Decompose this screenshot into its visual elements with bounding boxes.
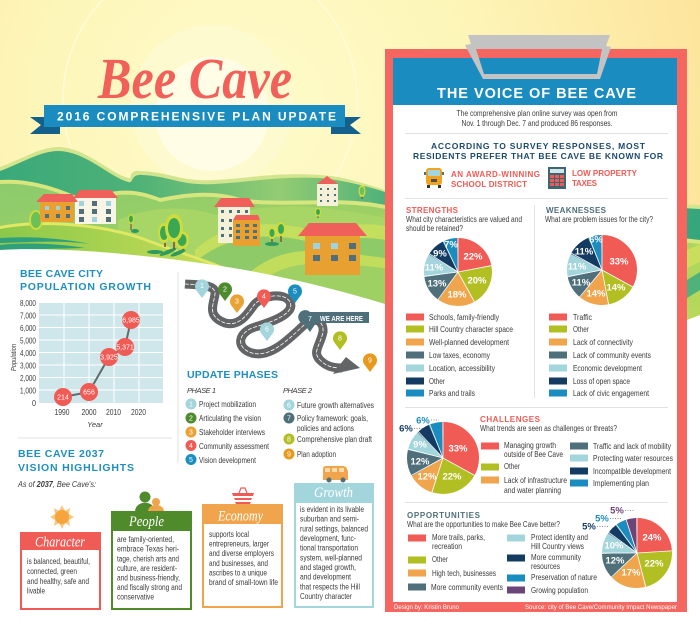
strengths section: STRENGTHS (406, 206, 459, 215)
line chart: population: Population (11, 344, 18, 371)
card: growth: is evident in its livable (300, 505, 364, 514)
survey intro: Nov. 1 through Dec. 7 and produced 86 responses. (462, 119, 612, 128)
card: people: and business-friendly, (117, 574, 180, 582)
survey heading: ACCORDING TO SURVEY RESPONSES, MOST (431, 141, 646, 151)
legend: weaknesses: Lack of civic engagement (573, 389, 650, 398)
pie chart: weaknesses: 11% (575, 246, 594, 258)
legend: opportunities: Other (432, 555, 448, 564)
opportunities section (407, 506, 673, 595)
pie chart: opportunities: 12% (605, 556, 625, 566)
pin 9 (363, 353, 377, 372)
pin 3 (230, 294, 244, 313)
survey heading: RESIDENTS PREFER THAT BEE CAVE BE KNOWN FOR (413, 151, 663, 161)
card: character (20, 532, 101, 609)
card: growth: tional transportation (300, 544, 358, 553)
card: economy (202, 504, 283, 607)
card: character: is balanced, beautiful, (27, 557, 90, 566)
pie chart: opportunities: 24% (642, 532, 662, 544)
card: growth: that respects the Hill (300, 582, 360, 591)
pie chart: strengths: 22% (463, 252, 483, 262)
legend: opportunities: High tech, businesses (432, 569, 496, 578)
background: sky and sun (0, 0, 700, 330)
clip tab (465, 35, 611, 79)
card: economy: Economy (217, 508, 263, 524)
legend: challenges: Traffic and lack of mobility (593, 442, 671, 451)
card: growth: Country character (300, 592, 352, 601)
line chart: population: 1,000 (20, 386, 36, 396)
card: growth: Growth (314, 485, 353, 501)
legend: challenges: Other (504, 462, 520, 471)
phase 1 list: Stakeholder interviews (199, 428, 265, 437)
phase 1 list: Articulating the vision (199, 414, 261, 423)
survey heading (413, 141, 663, 161)
phase 2 list (283, 386, 374, 460)
pie chart: strengths: 7% (444, 240, 458, 250)
heading: population growth (20, 268, 151, 293)
legend: strengths: Schools, family-friendly (429, 313, 499, 322)
heading: vision highlights: BEE CAVE 2037 (18, 448, 104, 460)
pie chart: weaknesses: 14% (586, 288, 606, 300)
pin 1: 1 (200, 283, 204, 290)
phase 2 list: 6 (287, 402, 291, 410)
panel title: THE VOICE OF BEE CAVE (437, 86, 636, 102)
line chart: population: 3,000 (20, 362, 36, 370)
card: economy: brand of small-town life (209, 578, 278, 587)
pie chart: challenges: 22% (442, 472, 462, 482)
pin 8: 8 (338, 336, 342, 342)
survey intro (456, 109, 618, 128)
legend: opportunities: More community (531, 553, 581, 562)
legend: strengths: Other (429, 377, 445, 386)
pin 4: 4 (262, 294, 266, 300)
pie chart: weaknesses: 14% (606, 282, 626, 294)
strengths section: should be retained? (406, 224, 463, 233)
pin 2 (218, 282, 232, 301)
heading: vision highlights: VISION HIGHLIGHTS (18, 462, 134, 474)
houses (36, 176, 367, 275)
legend: opportunities: resources (531, 562, 560, 571)
card: growth: development, func- (300, 534, 356, 543)
phase 2 list: Policy framework: goals, (297, 414, 368, 423)
pin 3: 3 (235, 298, 239, 306)
opportunities section: OPPORTUNITIES (407, 511, 481, 520)
known for: property taxes (572, 169, 638, 188)
phase 2 list: Plan adoption (297, 450, 336, 459)
pin 5 (288, 284, 302, 303)
phase 1 list: PHASE 1 (187, 386, 216, 395)
pin 6 (260, 322, 274, 341)
pin 5: 5 (293, 288, 297, 296)
card: economy: supports local (209, 530, 249, 539)
survey intro: The comprehensive plan online survey was open from (456, 109, 618, 118)
phase 2 list: Future growth alternatives (297, 401, 374, 410)
strengths section: What city characteristics are valued and (406, 215, 522, 224)
card: character: Character (35, 534, 85, 550)
heading: population growth: BEE CAVE CITY (20, 268, 103, 280)
pin 4 (257, 289, 271, 308)
icon: sun (50, 505, 74, 529)
legend: weaknesses: Loss of open space (573, 377, 630, 386)
pie chart: weaknesses: 6% (589, 234, 603, 246)
card: character: livable (27, 586, 45, 596)
card: people: People (128, 514, 164, 530)
legend: strengths: Low taxes, economy (429, 351, 490, 360)
card: people: culture, are resident- (117, 564, 177, 573)
legend: weaknesses: Other (573, 325, 589, 334)
panel: the voice of Bee Cave (385, 35, 687, 612)
pie chart: opportunities (582, 506, 673, 588)
card: growth: rural settings, balanced (300, 524, 368, 533)
legend: challenges: Managing growth (504, 441, 556, 450)
weaknesses section: What are problem issues for the city? (545, 215, 653, 224)
card: people: embrace Texas heri- (117, 545, 179, 554)
footer credits: Design by: Kristin Bruno (394, 604, 459, 611)
pin 7: we are here: 7 (308, 316, 312, 323)
card: people: are family-oriented, (117, 535, 174, 544)
legend: challenges: Lack of infrastructure (504, 476, 567, 485)
pie chart: strengths (423, 237, 492, 303)
pie chart: challenges: 33% (448, 444, 468, 454)
line chart: population: 2020 (131, 408, 146, 417)
icon: bus (323, 466, 348, 482)
landscape: rolling hills (0, 147, 700, 629)
pie chart: weaknesses: 11% (572, 278, 591, 288)
icon: shopping basket (232, 488, 254, 504)
line chart: population: 0 (32, 399, 36, 408)
phase 2 list: 9 (287, 452, 291, 458)
pie chart: weaknesses (567, 234, 634, 305)
pie chart: challenges (399, 416, 475, 493)
footer credits (394, 604, 678, 611)
legend: weaknesses: Lack of community events (573, 351, 651, 360)
legend: opportunities: More trails, parks, (432, 533, 485, 542)
pie chart: opportunities: 5% (610, 506, 624, 516)
line chart: population: 2000 (82, 408, 97, 417)
phase 2 list: Comprehensive plan draft (297, 435, 373, 444)
phase 2 list: 8 (287, 436, 291, 444)
pin 2: 2 (223, 286, 227, 294)
phase 1 list: 3 (189, 430, 193, 436)
pie chart: opportunities: 22% (644, 558, 664, 570)
legend: opportunities: Growing population (531, 586, 588, 595)
phase 1 list: 1 (189, 402, 193, 408)
pie chart: challenges: 9% (413, 440, 427, 450)
legend: opportunities: recreation (432, 542, 462, 551)
line chart: population: 7,000 (20, 312, 36, 320)
footer credits: Source: city of Bee Cave/Community Impact Newspaper (525, 604, 678, 611)
pie chart: opportunities: 5% (595, 514, 609, 524)
known for: property taxes: LOW PROPERTY (572, 169, 638, 178)
card: growth (294, 483, 374, 607)
card: people: tage, cherish arts and (117, 554, 179, 563)
challenges section (399, 415, 673, 495)
card: growth: system, well-planned (300, 553, 362, 562)
pie chart: opportunities: 17% (621, 568, 641, 578)
title: Bee Cave: Bee Cave (97, 46, 292, 111)
phase 1 list: Vision development (199, 456, 257, 465)
pie chart: challenges: 12% (410, 456, 430, 468)
phase 1 list: 5 (189, 457, 193, 464)
card: economy: ascribes to a unique (209, 568, 267, 578)
line chart: population: 5,371 (116, 344, 134, 352)
line chart: population: 2,000 (20, 374, 36, 383)
phase 1 list (186, 386, 270, 465)
pie chart: strengths: 11% (425, 262, 444, 274)
challenges section: What trends are seen as challenges or threats? (480, 424, 617, 433)
card: character: and healthy, safe and (27, 577, 89, 586)
legend: strengths: Parks and trails (429, 389, 475, 398)
icon: people (135, 492, 164, 511)
legend: challenges (481, 441, 673, 495)
pie chart: strengths: 13% (427, 278, 447, 290)
icon: calculator (548, 167, 566, 189)
line chart: population: 214 (57, 394, 69, 402)
pie chart: challenges: 6% (416, 416, 430, 426)
line chart: population: 656 (83, 390, 95, 396)
heading: vision highlights (17, 448, 134, 489)
pie chart: challenges: 12% (417, 472, 437, 482)
phase 2 list: policies and actions (297, 424, 354, 433)
line chart: population: 6,985 (122, 318, 140, 324)
heading: update phases: UPDATE PHASES (187, 369, 278, 381)
card: people (111, 511, 192, 609)
heading: population growth: POPULATION GROWTH (20, 281, 151, 293)
line chart: population: 3,925 (100, 354, 118, 362)
opportunities section: What are the opportunities to make Bee Cave better? (407, 520, 560, 529)
pie chart: strengths: 9% (433, 248, 447, 260)
pie chart: strengths: 20% (467, 276, 487, 286)
legend: strengths: Location, accessibility (429, 364, 495, 373)
card: economy: entrepreneurs, larger (209, 540, 269, 548)
legend: weaknesses: Economic development (573, 364, 643, 373)
legend: weaknesses (549, 313, 651, 398)
legend: opportunities: Protect identity and (531, 533, 588, 542)
line chart: population: 5,000 (20, 336, 36, 346)
strengths section (406, 206, 522, 398)
legend: opportunities (408, 533, 597, 595)
card: growth: and development (300, 573, 352, 582)
trees and shadows (29, 185, 366, 258)
pin 9: 9 (368, 358, 372, 364)
legend: challenges: and water planning (504, 486, 561, 495)
phase 1 list: 2 (189, 416, 193, 422)
known for: school district: AN AWARD-WINNING (451, 170, 540, 179)
legend: strengths: Hill Country character space (429, 325, 513, 334)
dividers (18, 272, 178, 463)
legend: opportunities: Preservation of nature (531, 573, 597, 582)
line chart: population: 6,000 (20, 324, 36, 333)
pin 7: we are here (298, 310, 369, 332)
pie chart: strengths: 18% (447, 290, 467, 300)
card: people: and fiscally strong and (117, 583, 182, 592)
known for: property taxes: TAXES (572, 179, 598, 188)
card: growth: suburban and semi- (300, 515, 359, 524)
icon: school bus (424, 168, 444, 188)
weaknesses section: WEAKNESSES (546, 206, 607, 215)
challenges section: CHALLENGES (480, 415, 541, 424)
ribbon banner (30, 105, 361, 134)
line chart: population (11, 299, 163, 429)
pin 8 (333, 331, 347, 350)
phase 1 list: Project mobilization (199, 400, 256, 409)
legend: challenges: Incompatible development (593, 467, 672, 476)
pie chart: opportunities: 5% (582, 522, 596, 532)
ribbon banner: 2016 COMPREHENSIVE PLAN UPDATE (57, 110, 336, 124)
known for: school district: SCHOOL DISTRICT (451, 180, 527, 189)
line chart: population: Year (87, 420, 103, 429)
line chart: population: 8,000 (20, 299, 36, 308)
card: growth: and staged growth, (300, 563, 356, 572)
pie chart: weaknesses: 11% (568, 262, 587, 272)
card: people: conservative (117, 593, 154, 602)
heading: vision highlights: As of 2037, Bee Cave's: (17, 480, 96, 489)
legend: opportunities: Hill Country views (531, 542, 584, 551)
weaknesses section (545, 206, 653, 398)
pie chart: challenges: 6% (399, 424, 413, 434)
pin 1 (195, 279, 209, 298)
phase 1 list: Community assessment (199, 442, 270, 451)
legend: weaknesses: Lack of connectivity (573, 338, 633, 347)
pie chart: opportunities: 10% (604, 540, 624, 552)
line chart: population: 4,000 (20, 349, 36, 358)
line chart: population: 2010 (106, 408, 121, 417)
legend: strengths: Well-planned development (429, 338, 510, 347)
legend: weaknesses: Traffic (573, 313, 592, 322)
pin 6: 6 (265, 326, 269, 334)
pin 7: we are here: WE ARE HERE (320, 316, 363, 323)
pie chart: weaknesses: 33% (609, 256, 629, 268)
legend: opportunities: More community events (431, 583, 503, 592)
legend: challenges: outside of Bee Cave (504, 450, 563, 459)
card: character: connected, green (27, 567, 77, 576)
card: economy: and diverse employers (209, 549, 274, 558)
known for: school district (451, 170, 540, 189)
legend: challenges: Protecting water resources (593, 454, 673, 463)
phase 2 list: 7 (287, 416, 291, 422)
line chart: population: 1990 (54, 408, 70, 417)
phase 2 list: PHASE 2 (283, 386, 313, 395)
card: economy: and businesses, and (209, 559, 268, 568)
phase 1 list: 4 (189, 443, 193, 450)
road map with phase pins (185, 279, 377, 374)
legend: strengths (406, 313, 513, 398)
legend: challenges: Implementing plan (593, 479, 649, 488)
